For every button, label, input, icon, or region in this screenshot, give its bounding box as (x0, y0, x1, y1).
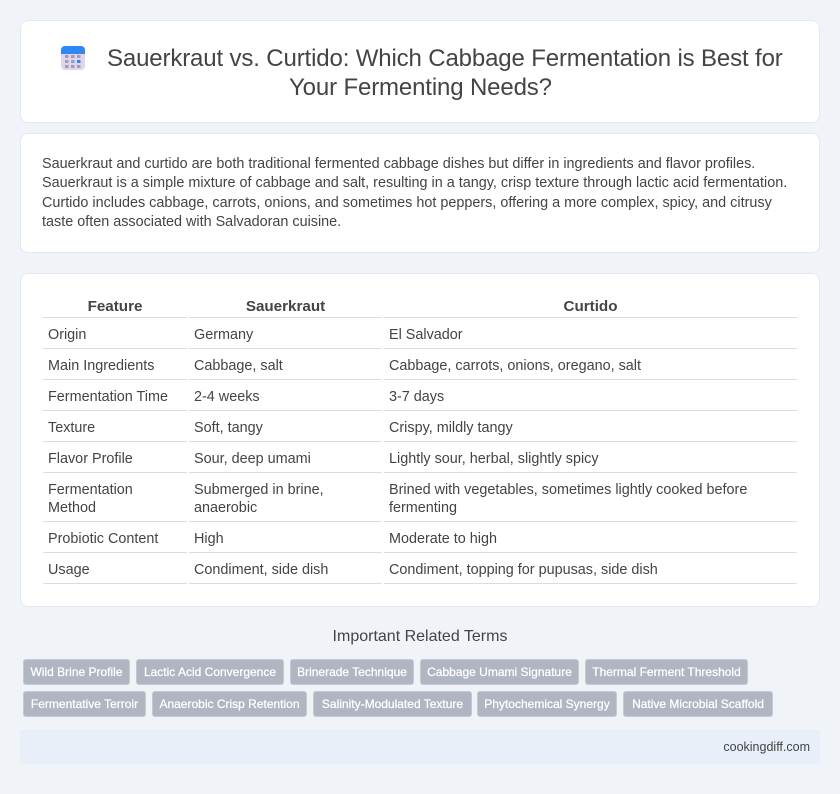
comparison table: Flavor Profile (48, 451, 133, 467)
related term tags: Anaerobic Crisp Retention (159, 697, 300, 711)
related term tags: Brinerade Technique (297, 665, 407, 679)
table header (88, 298, 618, 315)
comparison table: High (194, 531, 224, 547)
related term tags: Fermentative Terroir (31, 697, 138, 711)
comparison table: Probiotic Content (48, 531, 158, 547)
comparison table: Sour, deep umami (194, 451, 311, 467)
footer bar (20, 730, 820, 764)
comparison table: Soft, tangy (194, 420, 263, 436)
panel: title card (20, 20, 820, 123)
comparison table: Fermentation Time (48, 389, 168, 405)
intro text: taste often associated with Salvadoran cuisine. (42, 214, 341, 230)
comparison table: Main Ingredients (48, 358, 154, 374)
table header: Feature (88, 298, 142, 315)
comparison table: Lightly sour, herbal, slightly spicy (389, 451, 599, 467)
comparison table: Cabbage, salt (194, 358, 283, 374)
related term tags: Phytochemical Synergy (484, 697, 610, 711)
panel: introduction (20, 133, 820, 253)
comparison table: Germany (194, 327, 253, 343)
comparison table: Usage (48, 562, 90, 578)
related term tags: Native Microbial Scaffold (632, 697, 764, 711)
title: Your Fermenting Needs? (289, 74, 552, 101)
related term tags (23, 659, 773, 717)
comparison table: anaerobic (194, 500, 257, 516)
comparison table: Crispy, mildly tangy (389, 420, 513, 436)
heading: related terms: Important Related Terms (333, 628, 507, 645)
table header: Sauerkraut (246, 298, 325, 315)
comparison table: Moderate to high (389, 531, 497, 547)
intro text: Curtido includes cabbage, carrots, onions, and sometimes hot peppers, offering a more complex, spicy, and citrusy (42, 195, 772, 211)
panel: comparison table (20, 273, 820, 607)
comparison table: El Salvador (389, 327, 463, 343)
comparison table: 3-7 days (389, 389, 444, 405)
intro text: Sauerkraut is a simple mixture of cabbage and salt, resulting in a tangy, crisp texture through lactic acid fermentation. (42, 175, 787, 191)
table header: Curtido (564, 298, 618, 315)
related term tags: Cabbage Umami Signature (427, 665, 572, 679)
icon: calendar (61, 46, 85, 70)
comparison table: Origin (48, 327, 86, 343)
title (107, 45, 783, 101)
intro text (42, 156, 787, 230)
comparison table: Submerged in brine, (194, 482, 324, 498)
comparison table: Cabbage, carrots, onions, oregano, salt (389, 358, 641, 374)
comparison table: Condiment, side dish (194, 562, 328, 578)
comparison table: 2-4 weeks (194, 389, 260, 405)
comparison table: Condiment, topping for pupusas, side dish (389, 562, 658, 578)
related term tags: Salinity-Modulated Texture (322, 697, 463, 711)
related term tags: Lactic Acid Convergence (144, 665, 276, 679)
comparison table: Method (48, 500, 96, 516)
comparison table: Fermentation (48, 482, 133, 498)
comparison table: fermenting (389, 500, 457, 516)
related term tags: Wild Brine Profile (30, 665, 123, 679)
intro text: Sauerkraut and curtido are both traditional fermented cabbage dishes but differ in ingredients and flavor profiles. (42, 156, 755, 172)
title: Sauerkraut vs. Curtido: Which Cabbage Fermentation is Best for (107, 45, 783, 72)
comparison table: Brined with vegetables, sometimes lightly cooked before (389, 482, 747, 498)
comparison table: Texture (48, 420, 95, 436)
related term tags: Thermal Ferment Threshold (592, 665, 741, 679)
footer text: cookingdiff.com (723, 740, 810, 754)
